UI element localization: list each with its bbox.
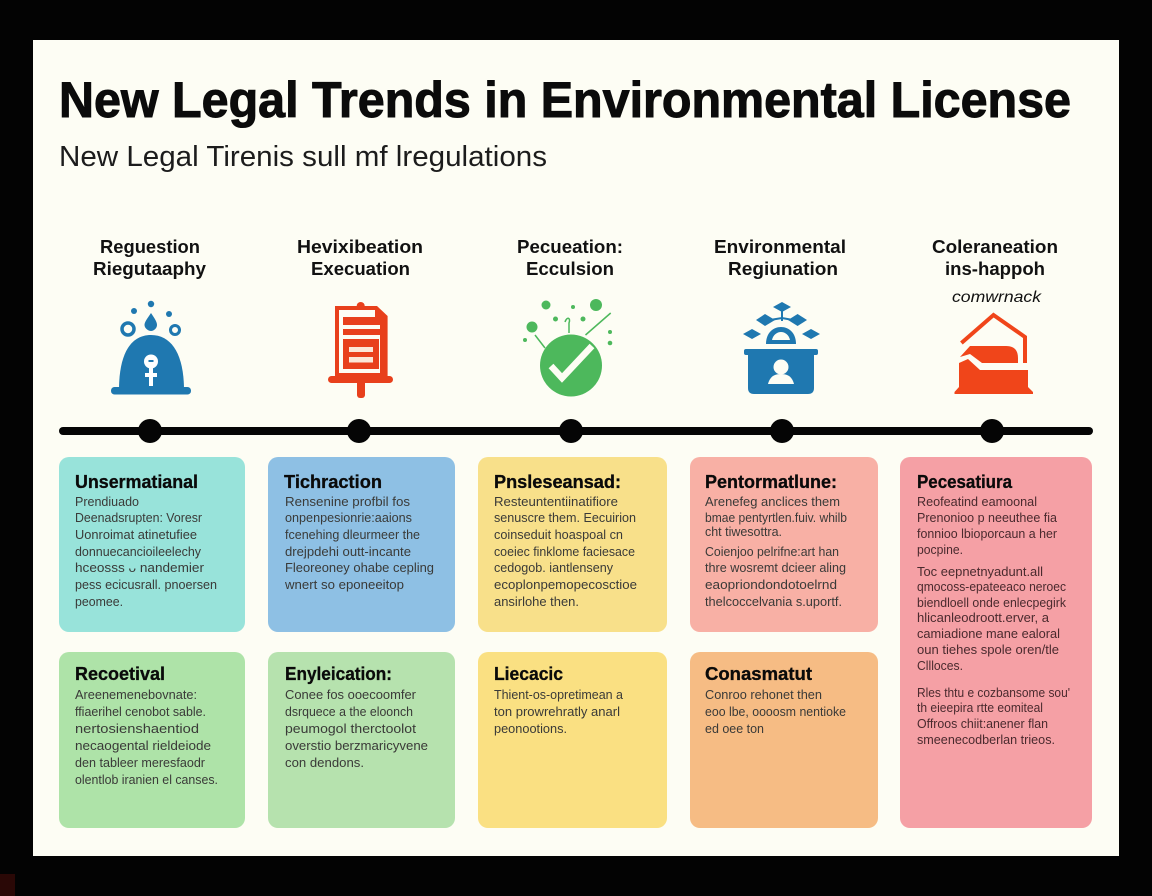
heading 1: Reguestion — [100, 237, 200, 257]
panel: tall pink card: th eieepira rtte eomiteal — [917, 701, 1043, 715]
panel: teal card: Deenadsrupten: Voresr — [75, 511, 202, 525]
panel: tall pink card: pocpine. — [917, 543, 963, 557]
panel: salmon card: thre wosremt dcieer aling — [705, 561, 846, 575]
panel: tall pink card: Reofeatind eamoonal — [917, 495, 1037, 509]
panel: salmon card: bmae pentyrtlen.fuiv. whilb — [705, 511, 847, 525]
subtitle: New Legal Tirenis sull mf lregulations — [59, 141, 547, 173]
heading 4: Environmental — [714, 237, 846, 257]
heading 2: Execuation — [311, 259, 410, 279]
panel: salmon card — [690, 457, 878, 632]
panel: orange card: eoo lbe, oooosm nentioke — [705, 705, 846, 719]
panel: tall pink card: Offroos chiit:anener flan — [917, 717, 1048, 731]
panel: yellow card: ecoplonpemopecosctioe — [494, 578, 637, 592]
heading 1 — [93, 237, 206, 279]
heading 3: Pecueation: — [517, 237, 623, 257]
panel: blue card: fcenehing dleurmeer the — [285, 528, 420, 542]
panel: salmon card: Arenefeg anclices them — [705, 495, 840, 509]
panel: teal card: Prendiuado — [75, 495, 139, 509]
panel: salmon card: Coienjoo pelrifne:art han — [705, 545, 839, 559]
panel: orange card — [690, 652, 878, 828]
heading 3 — [517, 237, 623, 279]
panel: yellow card: Resteuntentiinatifiore — [494, 495, 618, 509]
panel: green card: den tableer meresfaodr — [75, 756, 205, 770]
panel: teal card: pess ecicusrall. pnoersen — [75, 578, 217, 592]
icon: blue dome with water drop — [111, 301, 191, 394]
panel: salmon card: eaopriondondotoelrnd — [705, 578, 837, 592]
panel: teal card — [59, 457, 245, 632]
heading 1: Riegutaaphy — [93, 259, 206, 279]
heading 4: Regiunation — [728, 259, 838, 279]
icon: red document on stand — [328, 302, 393, 398]
heading 2 — [297, 237, 423, 279]
panel: light yellow card: ton prowrehratly anarl — [494, 705, 620, 719]
panel: yellow card — [478, 457, 667, 632]
panel: tall pink card: oun tiehes spole oren/tle — [917, 643, 1059, 657]
heading 5: ins-happoh — [945, 259, 1045, 279]
panel: yellow card: coeiec finklome faciesace — [494, 545, 635, 559]
panel: blue card: wnert so eponeeitop — [284, 578, 404, 592]
panel: green card: olentlob iranien el canses. — [75, 773, 218, 787]
panel: teal card: donnuecancioileelechy — [75, 545, 202, 559]
heading 5: comwrnack — [952, 289, 1042, 306]
panel: blue card: Fleoreoney ohabe cepling — [285, 561, 434, 575]
heading 5 — [932, 237, 1058, 306]
heading 3: Ecculsion — [526, 259, 614, 279]
panel: tall pink card: Rles thtu e cozbansome sou' — [917, 686, 1070, 700]
heading 4 — [714, 237, 846, 279]
panel: salmon card: Pentormatlune: — [705, 472, 837, 492]
column headings — [93, 237, 1058, 306]
panel: yellow card: Pnsleseansad: — [494, 472, 621, 492]
panel: light green card: dsrquece a the eloonch — [285, 705, 413, 719]
timeline — [59, 419, 1093, 443]
panel: tall pink card: camiadione mane ealoral — [917, 627, 1060, 641]
panel: light green card: Conee fos ooecoomfer — [285, 688, 416, 702]
panel: green card — [59, 652, 245, 828]
panel: tall pink card: fonnioo lbioporcaun a her — [917, 527, 1057, 541]
panel: light green card: Enyleication: — [285, 664, 392, 684]
panel: blue card: onpenpesionrie:aaions — [285, 511, 412, 525]
timeline marker 1 — [138, 419, 162, 443]
panel: salmon card: cht tiwesottra. — [705, 525, 782, 539]
panel: light yellow card — [478, 652, 667, 828]
panel: orange card: Conasmatut — [705, 664, 812, 684]
panel: green card: Areenemenebovnate: — [75, 688, 197, 702]
panel: teal card: hceosss ᴗ nandemier — [75, 561, 204, 575]
panel: light green card: con dendons. — [285, 756, 364, 770]
panel: teal card: Unsermatianal — [75, 472, 198, 492]
panel: tall pink card: hlicanleodroott.erver, a — [917, 611, 1049, 625]
frame corner tint — [0, 874, 15, 896]
panel: light green card: overstio berzmaricyvene — [285, 739, 428, 753]
panel: tall pink card: qmocoss-epateeaco neroec — [917, 580, 1066, 594]
panel: blue card: Tichraction — [284, 472, 382, 492]
panel: yellow card: ansirlohe then. — [494, 595, 579, 609]
panel: tall pink card: biendloell onde enlecpegirk — [917, 596, 1067, 610]
timeline marker 5 — [980, 419, 1004, 443]
panel: green card: Recoetival — [75, 664, 165, 684]
panel: green card: necaogental rieldeiode — [75, 739, 211, 753]
panel: yellow card: senuscre them. Eecuirion — [494, 511, 636, 525]
panel: blue card — [268, 457, 455, 632]
timeline marker 4 — [770, 419, 794, 443]
panel: teal card: peomee. — [75, 595, 123, 609]
panel: blue card: drejpdehi outt-incante — [285, 545, 411, 559]
timeline marker 2 — [347, 419, 371, 443]
panel: light green card: peumogol therctoolot — [285, 722, 417, 736]
icon: orange house — [954, 315, 1033, 394]
panel: yellow card: coinseduit hoaspoal cn — [494, 528, 623, 542]
panel: blue card: Rensenine profbil fos — [285, 495, 410, 509]
panel: green card: nertosienshaentiod — [75, 722, 199, 736]
panel: yellow card: cedogob. iantlenseny — [494, 561, 614, 575]
panel: salmon card: thelcoccelvania s.uportf. — [705, 595, 842, 609]
panel: tall pink card: Toc eepnetnyadunt.all — [917, 565, 1043, 579]
panel: light yellow card: peonootions. — [494, 722, 567, 736]
panel: tall pink card: Pecesatiura — [917, 472, 1013, 492]
panel: tall pink card — [900, 457, 1092, 828]
panel: tall pink card: smeenecodberlan trieos. — [917, 733, 1055, 747]
title: New Legal Trends in Environmental License — [59, 72, 1071, 128]
heading 2: Hevixibeation — [297, 237, 423, 257]
icon: blue case with network — [743, 302, 820, 394]
panel: light yellow card: Thient-os-opretimean a — [494, 688, 623, 702]
icon: green check with dots — [523, 299, 612, 396]
panel: light yellow card: Liecacic — [494, 664, 563, 684]
panel: orange card: ed oee ton — [705, 722, 764, 736]
panel: light green card — [268, 652, 455, 828]
panel: tall pink card: Prenonioo p neeuthee fia — [917, 511, 1057, 525]
heading 5: Coleraneation — [932, 237, 1058, 257]
panel: orange card: Conroo rehonet then — [705, 688, 822, 702]
timeline marker 3 — [559, 419, 583, 443]
panel: tall pink card: Cllloces. — [917, 659, 963, 673]
panel: green card: ffiaerihel cenobot sable. — [75, 705, 206, 719]
panel: teal card: Uonroimat atinetufiee — [75, 528, 197, 542]
